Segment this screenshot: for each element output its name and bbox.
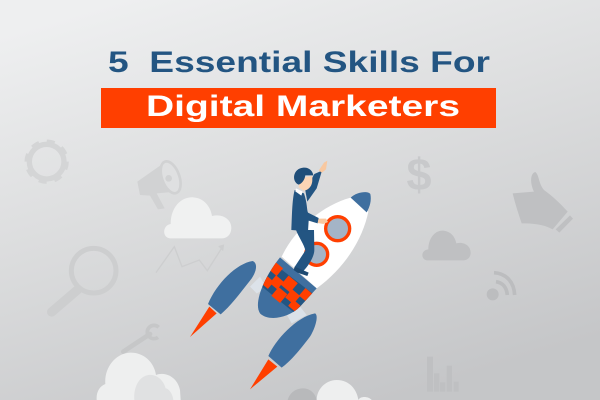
hair [294,168,313,185]
icon: megaphone [137,159,185,209]
icon: rss signal [487,273,515,300]
icon: white cloud [164,197,231,238]
icon: bottom clouds [97,353,181,400]
rocket body [258,192,371,318]
face [299,176,312,191]
right background icons [406,149,573,392]
exhaust glow [250,277,307,323]
icon: rising line chart [156,245,223,273]
raised arm [305,171,322,202]
banner: Digital Marketers [101,88,496,128]
icon: gear [26,141,67,182]
rocket nose [351,192,371,212]
title [101,46,496,128]
checker pattern [260,262,313,313]
icon: magnifying glass [52,248,116,312]
rocket illustration [190,161,372,400]
icon: dark cloud [422,231,471,260]
porthole upper [326,217,350,241]
icon: thumbs up [513,172,573,233]
icon: dollar sign: $ [406,149,432,200]
heading: 5 Essential Skills For: 5 Essential Skills For [108,46,490,79]
hand on rocket [318,219,328,224]
left fin with flame [190,261,256,337]
businessman [291,161,328,276]
rocket base [258,257,317,318]
collar [295,188,303,196]
icon: bar chart [427,357,459,392]
icon: wrench [123,325,159,352]
left background icons [26,141,231,400]
banner: Digital Marketers: Digital Marketers [146,90,460,123]
legs [294,230,314,272]
shoe [294,267,309,276]
bottom globe and cloud [288,380,372,400]
jacket [291,190,319,231]
right fin with flame [250,313,317,389]
porthole lower [306,243,328,265]
hand raised [319,161,327,173]
